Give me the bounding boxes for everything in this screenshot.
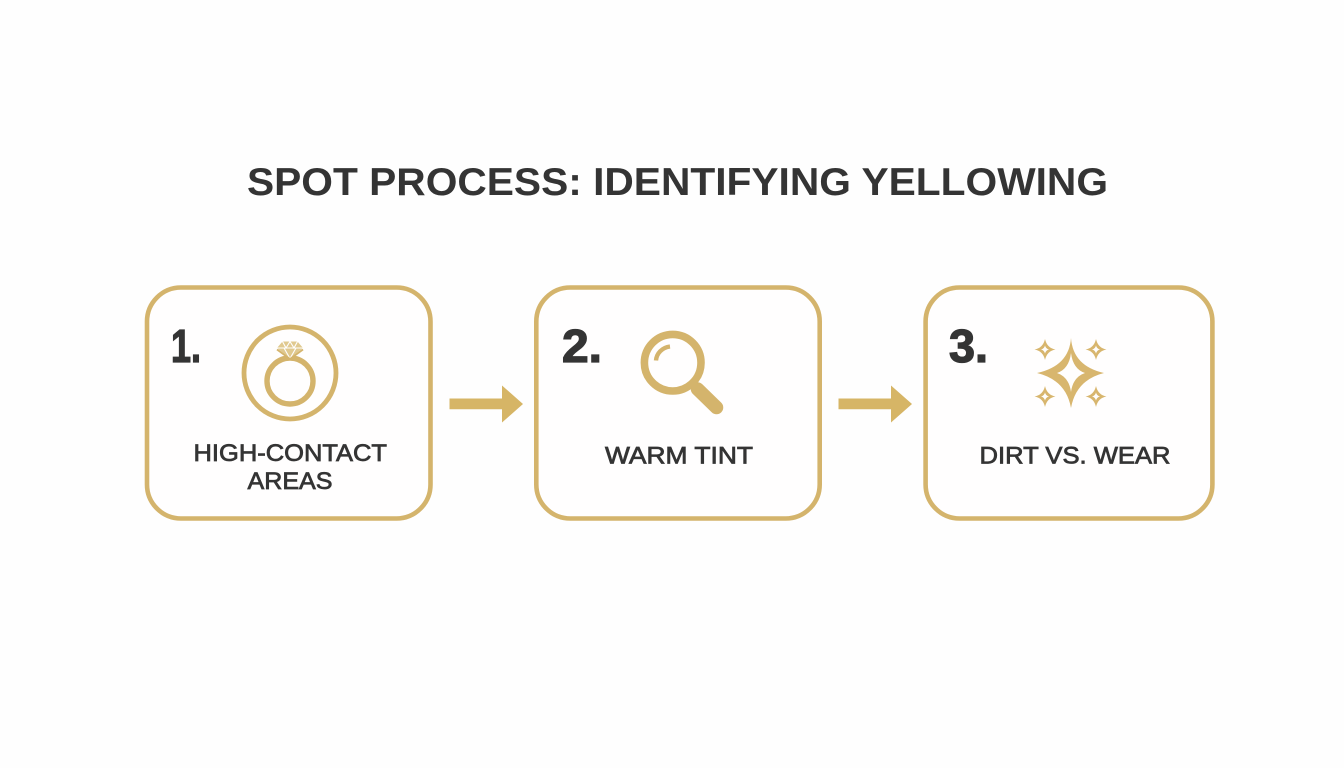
icon: diamond ring bbox=[244, 327, 336, 419]
card outline 1 bbox=[147, 288, 430, 518]
label: dirt vs. wear: DIRT VS. WEAR bbox=[980, 442, 1170, 470]
icon: sparkles bbox=[1034, 338, 1106, 408]
panel: step 2 warm tint bbox=[536, 288, 820, 518]
label: high-contact areas: HIGH-CONTACT bbox=[194, 440, 387, 467]
label: warm tint: WARM TINT bbox=[605, 442, 753, 470]
card outline 2 bbox=[536, 288, 820, 518]
step number 1: 1. bbox=[171, 320, 201, 372]
step number 2: 2. bbox=[562, 320, 602, 372]
title: SPOT PROCESS: IDENTIFYING YELLOWING bbox=[247, 161, 1108, 204]
card outline 3 bbox=[926, 288, 1212, 518]
arrow: step 2 to step 3 bbox=[838, 386, 912, 422]
panel: step 1 high-contact areas bbox=[147, 288, 430, 518]
label: high-contact areas: AREAS bbox=[248, 468, 332, 495]
label: high-contact areas bbox=[194, 440, 387, 495]
arrow: step 1 to step 2 bbox=[450, 386, 523, 422]
panel: step 3 dirt vs. wear bbox=[926, 288, 1212, 518]
icon: magnifying glass bbox=[644, 334, 716, 408]
step number 3: 3. bbox=[949, 320, 988, 372]
